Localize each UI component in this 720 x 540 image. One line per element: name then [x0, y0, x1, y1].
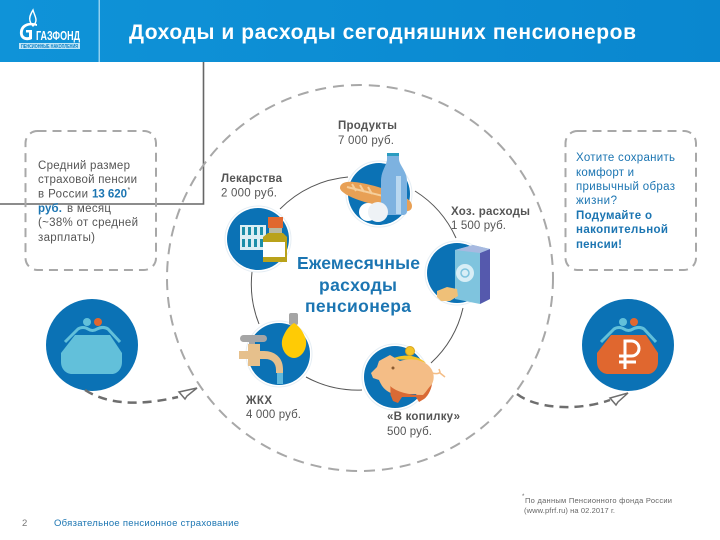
label: medicine: Лекарства — [221, 173, 283, 185]
icon: household goods — [425, 241, 490, 305]
title: Доходы и расходы сегодняшних пенсионеров — [129, 21, 636, 44]
arrow: left purse to circle — [85, 388, 197, 403]
center heading: пенсионера — [305, 296, 411, 316]
right callout: call to action: Хотите сохранить — [576, 152, 675, 164]
label: savings: «В копилку» — [387, 411, 460, 423]
logo: Gazfond: ГАЗФОНД — [36, 28, 81, 43]
inner expense cycle ring — [251, 177, 463, 390]
arrow: circle to right purse — [517, 393, 628, 407]
left callout: average pension: в России — [38, 188, 88, 200]
label: food: 7 000 руб. — [338, 135, 394, 147]
icon: utilities (tap, bulb) — [239, 313, 312, 387]
logo: Gazfond: ПЕНСИОННЫЕ НАКОПЛЕНИЯ — [21, 44, 78, 50]
left callout: average pension: (~38% от средней — [38, 217, 138, 229]
right callout: call to action: пенсии! — [576, 239, 622, 251]
label: utilities: ЖКХ — [245, 395, 272, 407]
center heading: расходы — [319, 275, 397, 295]
right callout: call to action: привычный образ — [576, 181, 675, 193]
label: food — [338, 120, 397, 147]
center heading — [297, 253, 420, 316]
label: household — [451, 206, 530, 232]
right callout: call to action: жизни? — [576, 195, 617, 207]
left callout: average pension: 13 620 — [92, 188, 127, 200]
left callout: average pension: страховой пенсии — [38, 174, 137, 186]
label: medicine — [221, 173, 283, 200]
header band — [0, 0, 720, 62]
icon: medicine (pills, bottle) — [225, 206, 291, 272]
footnote — [522, 494, 672, 515]
outer dashed circle — [167, 85, 553, 471]
footnote: По данным Пенсионного фонда России — [525, 496, 672, 505]
left callout: average pension: Средний размер — [38, 160, 130, 172]
label: utilities: 4 000 руб. — [246, 409, 301, 421]
label: savings — [387, 411, 460, 438]
label: savings: 500 руб. — [387, 426, 432, 438]
left callout: average pension: в месяц — [67, 203, 111, 215]
footnote: (www.pfrf.ru) на 02.2017 г. — [524, 506, 615, 515]
right callout: call to action: накопительной — [576, 224, 668, 236]
label: household: Хоз. расходы — [451, 206, 530, 218]
icon: purse with rouble — [582, 299, 674, 391]
footnote: * — [522, 494, 525, 500]
left callout: average pension: зарплаты) — [38, 232, 95, 244]
label: household: 1 500 руб. — [451, 220, 506, 232]
icon: piggy bank — [362, 344, 445, 410]
right callout: call to action: Подумайте о — [576, 210, 652, 222]
center heading: Ежемесячные — [297, 253, 420, 273]
label: utilities — [245, 395, 301, 421]
left callout: average pension: * — [128, 187, 130, 194]
right callout: call to action — [566, 131, 696, 270]
corner frame lines — [0, 62, 204, 204]
right callout: call to action: комфорт и — [576, 167, 634, 179]
left callout: average pension — [26, 131, 156, 270]
label: food: Продукты — [338, 120, 397, 132]
logo: Gazfond — [19, 10, 81, 50]
icon: food (bread, milk, eggs) — [340, 153, 412, 227]
left callout: average pension: руб. — [38, 203, 62, 215]
footer: page number and section: 2 — [22, 518, 27, 529]
footer: page number and section: Обязательное пенсионное страхование — [54, 518, 239, 529]
icon: empty purse — [46, 299, 138, 391]
label: medicine: 2 000 руб. — [221, 188, 277, 200]
